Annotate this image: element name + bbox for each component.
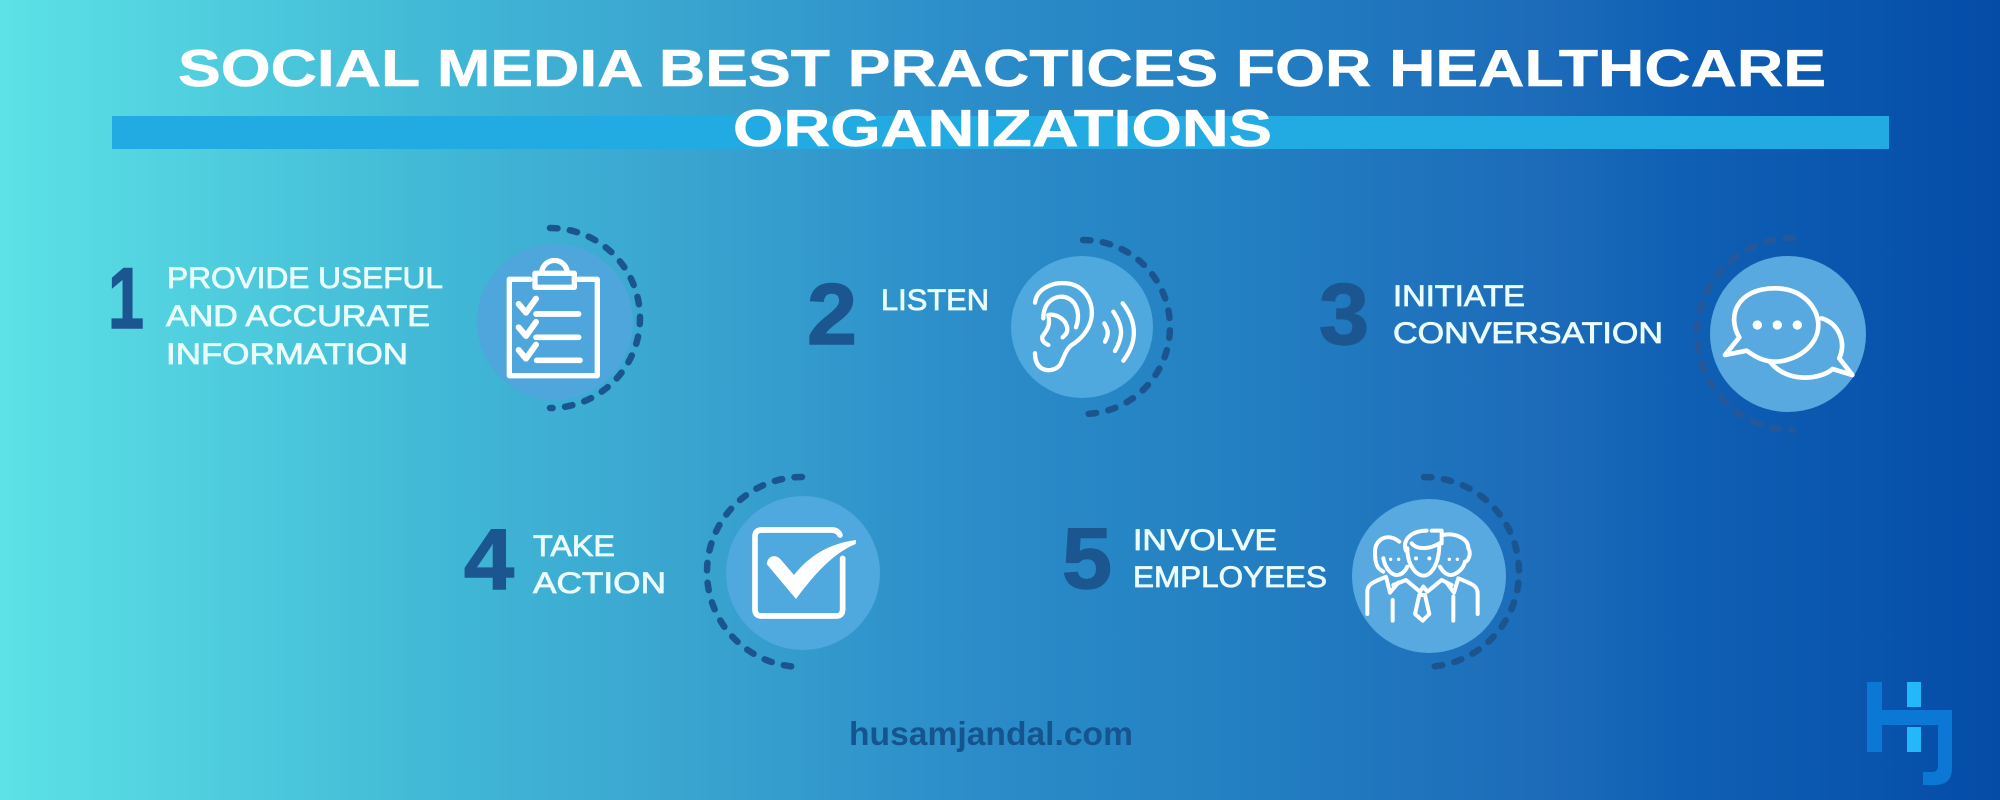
- number 1: 1: [108, 251, 144, 347]
- item 4 label: ACTION: [533, 567, 666, 600]
- icon: clipboard checklist: [477, 228, 640, 408]
- footer website: husamjandal.com: [849, 715, 1133, 752]
- icon: ear: [1011, 240, 1170, 414]
- item 2: listen: [807, 240, 1170, 414]
- icon: check box: [707, 477, 880, 667]
- item 3: initiate conversation: [1319, 238, 1866, 430]
- item 3 label: INITIATE: [1393, 280, 1525, 313]
- number 2: 2: [807, 267, 857, 363]
- item 5: involve employees: [1062, 477, 1519, 667]
- title: ORGANIZATIONS: [733, 100, 1272, 158]
- icon: team of people: [1352, 477, 1519, 667]
- item 5 label: EMPLOYEES: [1133, 561, 1327, 594]
- item 4 label: TAKE: [533, 530, 615, 563]
- logo: HJ monogram: [1867, 682, 1952, 785]
- item 4: take action: [464, 477, 880, 667]
- item 1 label: AND ACCURATE: [166, 300, 430, 333]
- item 1: provide useful and accurate information: [108, 228, 640, 408]
- number 3: 3: [1319, 267, 1369, 363]
- icon: speech bubbles: [1697, 238, 1866, 430]
- title: SOCIAL MEDIA BEST PRACTICES FOR HEALTHCARE: [178, 40, 1826, 98]
- item 4 label: [533, 530, 666, 600]
- item 1 label: INFORMATION: [166, 338, 408, 371]
- title: [178, 40, 1826, 158]
- item 3 label: [1393, 280, 1663, 350]
- item 3 label: CONVERSATION: [1393, 317, 1663, 350]
- item 1 label: [166, 262, 443, 371]
- number 5: 5: [1062, 511, 1112, 607]
- item 5 label: INVOLVE: [1133, 524, 1277, 557]
- item 2 label: LISTEN: [881, 284, 989, 317]
- title banner bar: [112, 116, 1889, 149]
- item 5 label: [1133, 524, 1327, 594]
- item 1 label: PROVIDE USEFUL: [167, 262, 443, 295]
- number 4: 4: [464, 512, 514, 608]
